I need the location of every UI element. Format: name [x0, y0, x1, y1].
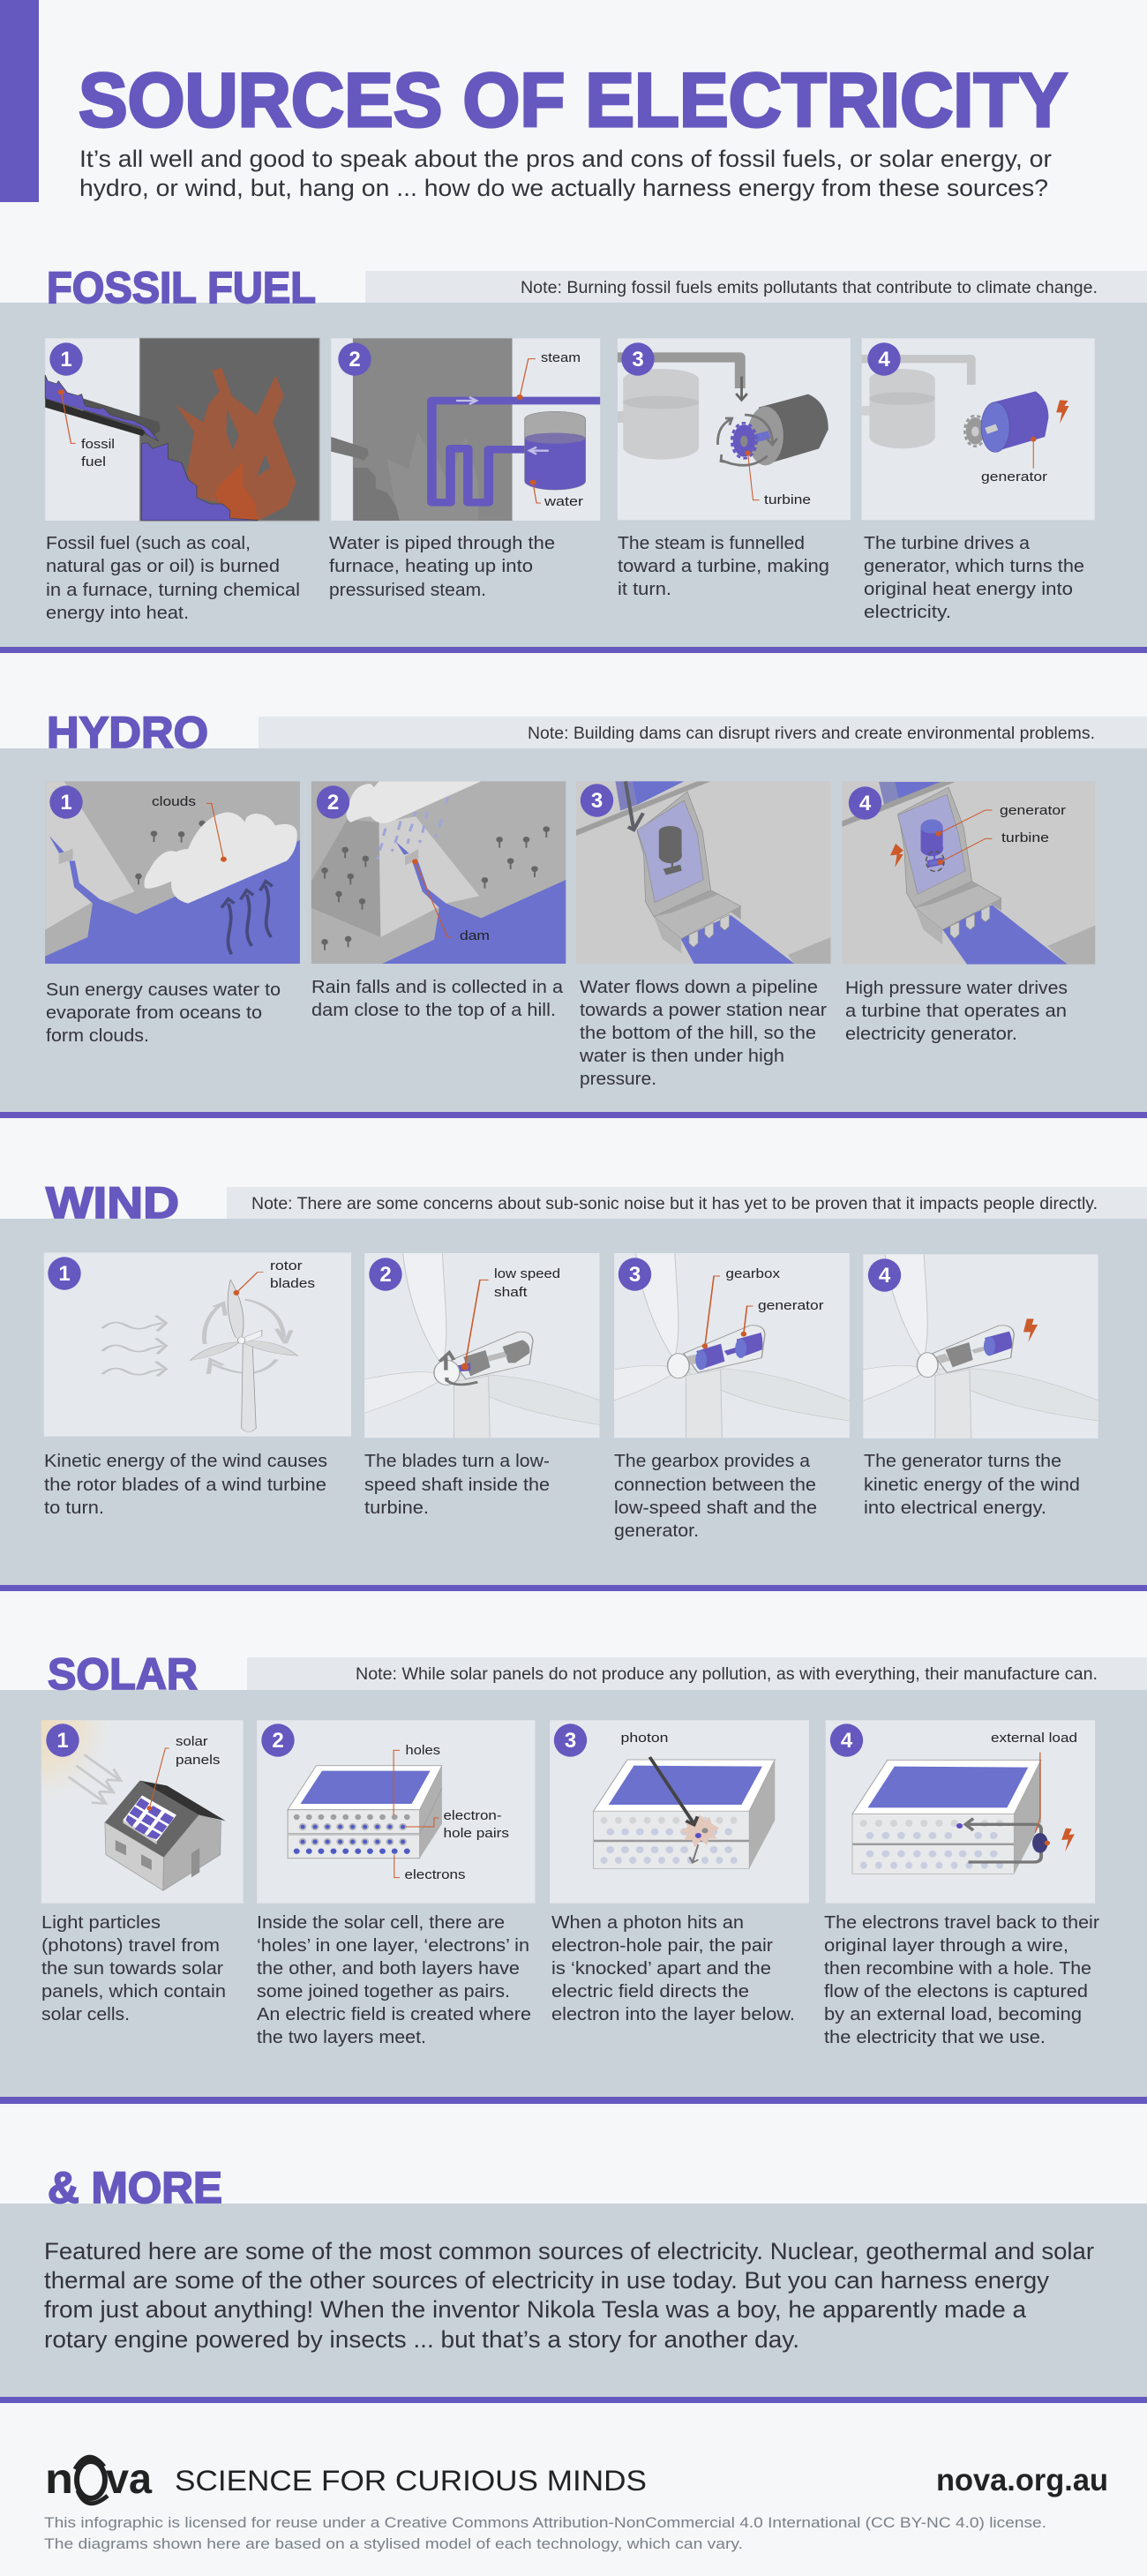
fossil step 1 text: energy into heat.	[46, 604, 189, 623]
wind step 4 text: kinetic energy of the wind	[864, 1476, 1080, 1495]
nova logo: va	[106, 2456, 152, 2503]
wind diagram labels: blades	[270, 1276, 315, 1291]
fossil diagrams 3 and 4	[618, 338, 1095, 520]
step 3 illustration: gearbox and generator	[614, 1253, 850, 1438]
step 1 illustration: house with solar panels	[41, 1720, 244, 1904]
hydro diagram labels: turbine	[1001, 830, 1049, 845]
fossil step 1 text: Fossil fuel (such as coal,	[46, 534, 251, 553]
nova logo	[45, 2456, 152, 2504]
purple divider	[0, 647, 1147, 653]
solar step 3 text: When a photon hits an	[551, 1913, 744, 1933]
solar step 3 text: electron into the layer below.	[551, 2005, 795, 2024]
solar step 4 text: The electrons travel back to their	[824, 1913, 1099, 1933]
intro text: hydro, or wind, but, hang on ... how do we actually harness energy from these sources?	[79, 175, 1048, 201]
wind step badges: 4	[879, 1264, 891, 1288]
hydro step 4 text: High pressure water drives	[845, 979, 1068, 998]
footer	[44, 2456, 1108, 2552]
purple divider	[0, 1585, 1147, 1591]
grey section panel	[0, 2204, 1147, 2397]
solar step 4 text: flow of the electons is captured	[824, 1982, 1088, 2001]
wind step 2 text: The blades turn a low-	[364, 1452, 550, 1471]
fossil step badges: 4	[878, 348, 890, 372]
solar diagram labels: hole pairs	[443, 1826, 509, 1841]
solar diagram labels: panels	[176, 1753, 221, 1768]
solar step 2 text: An electric field is created where	[257, 2005, 531, 2024]
solar step 3 text	[551, 1913, 795, 2024]
wind step 3 text: connection between the	[614, 1476, 816, 1495]
solar step badges: 2	[272, 1729, 284, 1753]
solar diagram labels: holes	[406, 1743, 440, 1758]
wind step 3 text	[614, 1452, 817, 1541]
fossil diagram labels: water	[544, 494, 583, 509]
hydro step 1 text	[46, 980, 281, 1046]
solar step 2 text: ‘holes’ in one layer, ‘electrons’ in	[257, 1936, 529, 1956]
purple divider	[0, 2097, 1147, 2104]
note text: Note: Building dams can disrupt rivers and create environmental problems.	[528, 725, 1095, 743]
purple divider	[0, 2397, 1147, 2403]
solar step 3 text: electric field directs the	[551, 1982, 749, 2001]
fossil step 4 text: electricity.	[864, 603, 951, 622]
hydro step badges: 2	[327, 791, 339, 815]
solar step badges: 4	[841, 1729, 853, 1753]
step 2 illustration: low speed shaft	[364, 1253, 600, 1438]
solar diagram labels: solar	[176, 1734, 208, 1749]
hydro step 2 text: Rain falls and is collected in a	[311, 978, 564, 997]
hydro step 3 text: towards a power station near	[580, 1001, 827, 1020]
licence text: The diagrams shown here are based on a stylised model of each technology, which can vary.	[44, 2535, 743, 2552]
grey section panel	[0, 1690, 1147, 2097]
wind diagram labels: generator	[758, 1298, 824, 1313]
hydro step 1 text: evaporate from oceans to	[46, 1003, 262, 1023]
heading: and more: & MORE	[48, 2163, 222, 2212]
hydro step 4 text	[845, 979, 1068, 1044]
fossil diagram labels: turbine	[764, 492, 811, 507]
solar step 4 text: then recombine with a hole. The	[824, 1959, 1091, 1979]
heading: hydro: HYDRO	[47, 708, 208, 757]
note text: Note: While solar panels do not produce any pollution, as with everything, their manufacture can.	[356, 1665, 1098, 1684]
fossil step 2 text: pressurised steam.	[329, 581, 486, 600]
closing paragraph	[44, 2238, 1094, 2353]
hydro step 3 text: Water flows down a pipeline	[580, 978, 818, 997]
note text: Note: There are some concerns about sub-sonic noise but it has yet to be proven that it impacts people directly.	[251, 1195, 1098, 1213]
note text: Note: Burning fossil fuels emits pollutants that contribute to climate change.	[521, 279, 1098, 297]
hydro diagram labels: dam	[460, 928, 490, 943]
hydro step 2 text: dam close to the top of a hill.	[311, 1001, 556, 1020]
heading: solar: SOLAR	[48, 1649, 198, 1699]
section: wind	[0, 1178, 1147, 1591]
wind step badges	[48, 1257, 901, 1292]
step 3 illustration: power station	[576, 781, 830, 964]
hydro step 2 text	[311, 978, 564, 1020]
fossil step 2 text: Water is piped through the	[329, 534, 555, 553]
heading: fossil fuel: FOSSIL FUEL	[47, 263, 316, 312]
closing paragraph: rotary engine powered by insects ... but that’s a story for another day.	[44, 2326, 799, 2353]
fossil step 3 text	[618, 534, 829, 599]
purple divider	[0, 1112, 1147, 1118]
closing paragraph: thermal are some of the other sources of electricity in use today. But you can harness energy	[44, 2267, 1050, 2294]
step 1 illustration: wind turbine	[44, 1252, 351, 1437]
hydro step 3 text: pressure.	[580, 1070, 656, 1089]
solar step 1 text: panels, which contain	[41, 1982, 226, 2001]
hydro step 4 text: electricity generator.	[845, 1025, 1017, 1044]
fossil diagram labels: fuel	[81, 454, 106, 469]
wind step 4 text: The generator turns the	[864, 1452, 1061, 1471]
closing paragraph: Featured here are some of the most common sources of electricity. Nuclear, geothermal and solar	[44, 2238, 1094, 2264]
solar step 1 text: solar cells.	[41, 2005, 130, 2024]
solar step 2 text: the other, and both layers have	[257, 1959, 520, 1979]
tagline: SCIENCE FOR CURIOUS MINDS	[175, 2465, 647, 2497]
grey section panel	[0, 303, 1147, 647]
website: nova.org.au	[936, 2463, 1108, 2497]
hydro step badges: 1	[60, 791, 72, 815]
solar step 2 text	[257, 1913, 531, 2047]
intro text: It’s all well and good to speak about the pros and cons of fossil fuels, or solar energy, or	[79, 146, 1052, 172]
fossil step 3 text: The steam is funnelled	[618, 534, 805, 553]
step 2 illustration: boiler pipes	[331, 338, 600, 521]
solar step 2 text: some joined together as pairs.	[257, 1982, 510, 2001]
hydro step 3 text: water is then under high	[579, 1047, 784, 1066]
fossil step 2 text: furnace, heating up into	[329, 557, 533, 576]
note bar	[247, 1657, 1147, 1690]
solar step 2 text: Inside the solar cell, there are	[257, 1913, 505, 1933]
solar step 1 text: the sun towards solar	[41, 1959, 223, 1979]
grey section panel	[0, 748, 1147, 1112]
step 2 illustration: rain and dam	[311, 781, 566, 964]
fossil step 3 text: it turn.	[618, 580, 671, 599]
wind step badges: 1	[58, 1262, 71, 1286]
step 4 illustration: generator and turbine	[842, 781, 1095, 965]
step 1 illustration: evaporation	[45, 781, 300, 964]
fossil diagram labels: fossil	[81, 437, 115, 452]
section: and more	[0, 2163, 1147, 2403]
hydro diagram labels: clouds	[152, 794, 196, 809]
wind step 3 text: generator.	[614, 1521, 699, 1541]
title: SOURCES OF ELECTRICITY	[79, 58, 1068, 143]
solar diagram labels	[176, 1731, 1077, 1882]
fossil step 1 text: in a furnace, turning chemical	[46, 581, 300, 600]
wind step 1 text	[44, 1452, 327, 1518]
fossil step badges: 2	[349, 348, 361, 372]
solar step 3 text: is ‘knocked’ apart and the	[551, 1959, 771, 1979]
header block	[0, 0, 1068, 202]
wind diagram labels: gearbox	[725, 1266, 781, 1281]
fossil step 1 text	[46, 534, 300, 623]
wind diagrams 2 to 4	[364, 1253, 1098, 1438]
wind step 4 text	[864, 1452, 1080, 1518]
wind step 2 text	[364, 1452, 550, 1518]
solar diagram labels: photon	[621, 1731, 669, 1746]
fossil step 4 text	[864, 534, 1084, 622]
wind step 3 text: low-speed shaft and the	[614, 1498, 817, 1518]
section: solar	[0, 1649, 1147, 2104]
solar step 4 text	[824, 1913, 1099, 2047]
wind step 4 text: into electrical energy.	[864, 1498, 1046, 1518]
wind step 1 text: Kinetic energy of the wind causes	[44, 1452, 327, 1471]
fossil step 2 text	[329, 534, 555, 600]
step 1 illustration: furnace	[45, 338, 319, 521]
wind step badges: 2	[379, 1263, 392, 1287]
fossil diagram labels: generator	[981, 469, 1047, 484]
hydro diagram labels: generator	[1000, 803, 1066, 818]
wind step 1 text: the rotor blades of a wind turbine	[44, 1476, 326, 1495]
fossil step 4 text: generator, which turns the	[864, 557, 1084, 576]
fossil step badges	[49, 342, 901, 376]
hydro diagrams 1 and 2	[45, 781, 566, 964]
accent bar	[0, 0, 39, 202]
solar step badges	[46, 1724, 863, 1757]
fossil step 4 text: original heat energy into	[864, 580, 1073, 599]
solar step 4 text: by an external load, becoming	[824, 2005, 1082, 2024]
solar diagram labels: electrons	[404, 1867, 466, 1882]
fossil step 1 text: natural gas or oil) is burned	[46, 557, 280, 576]
wind diagram labels: rotor	[270, 1258, 303, 1273]
licence text	[44, 2514, 1046, 2552]
wind step 2 text: speed shaft inside the	[364, 1476, 550, 1495]
fossil step 3 text: toward a turbine, making	[618, 557, 829, 576]
note bar	[365, 271, 1147, 303]
fossil step 4 text: The turbine drives a	[864, 534, 1031, 553]
solar step 3 text: electron-hole pair, the pair	[551, 1936, 773, 1956]
hydro step badges: 4	[859, 792, 872, 815]
solar step badges: 1	[56, 1729, 69, 1753]
fossil diagrams 1 and 2	[45, 338, 600, 521]
wind step 2 text: turbine.	[364, 1498, 429, 1518]
note bar	[227, 1187, 1147, 1219]
hydro step 3 text	[579, 978, 827, 1089]
hydro diagram labels	[152, 794, 1066, 943]
step 2 illustration: solar cell layers	[257, 1720, 536, 1904]
solar step 1 text: Light particles	[41, 1913, 161, 1933]
wind diagram labels: low speed	[494, 1266, 560, 1281]
licence text: This infographic is licensed for reuse under a Creative Commons Attribution-NonCommercial 4.0 International (CC BY-NC 4.0) license.	[44, 2514, 1046, 2531]
intro text	[79, 146, 1052, 201]
fossil diagram labels	[81, 350, 1047, 509]
wind step 3 text: The gearbox provides a	[614, 1452, 811, 1471]
step 4 illustration: electrical energy	[863, 1254, 1098, 1438]
solar diagrams 3 and 4	[550, 1720, 1095, 1904]
step 3 illustration: turbine	[618, 338, 851, 520]
solar step 1 text	[41, 1913, 226, 2024]
grey section panel	[0, 1219, 1147, 1585]
section: hydro	[0, 708, 1147, 1118]
wind diagram labels: shaft	[494, 1285, 528, 1300]
hydro step 1 text: Sun energy causes water to	[46, 980, 281, 1000]
section: fossil fuel	[0, 263, 1147, 653]
hydro step badges	[49, 784, 881, 820]
step 4 illustration: generator	[862, 338, 1095, 520]
hydro step 3 text: the bottom of the hill, so the	[580, 1024, 816, 1043]
hydro step 1 text: form clouds.	[46, 1026, 149, 1046]
solar diagram labels: external load	[991, 1731, 1077, 1746]
solar step 4 text: the electricity that we use.	[824, 2028, 1046, 2047]
hydro step 4 text: a turbine that operates an	[845, 1002, 1067, 1021]
wind step badges: 3	[629, 1263, 641, 1287]
hydro step badges: 3	[591, 789, 603, 813]
fossil diagram labels: steam	[541, 350, 581, 365]
note bar	[259, 717, 1147, 748]
wind diagram labels	[270, 1258, 824, 1313]
heading: wind: WIND	[46, 1178, 179, 1228]
solar diagrams 1 and 2	[41, 1720, 536, 1904]
fossil step badges: 3	[632, 348, 644, 372]
step 4 illustration: external load	[826, 1720, 1095, 1904]
solar diagram labels: electron-	[443, 1808, 502, 1823]
nova logo: n	[45, 2456, 73, 2503]
wind step 1 text: to turn.	[44, 1498, 104, 1518]
solar step 1 text: (photons) travel from	[41, 1936, 220, 1956]
solar step badges: 3	[565, 1729, 576, 1753]
solar step 2 text: the two layers meet.	[257, 2028, 426, 2047]
step 3 illustration: photon strike	[550, 1720, 809, 1904]
closing paragraph: from just about anything! When the inventor Nikola Tesla was a boy, he apparently made a	[44, 2296, 1027, 2323]
hydro diagrams 3 and 4	[576, 781, 1095, 965]
solar step 4 text: original layer through a wire,	[824, 1936, 1068, 1956]
fossil step badges: 1	[60, 348, 72, 372]
